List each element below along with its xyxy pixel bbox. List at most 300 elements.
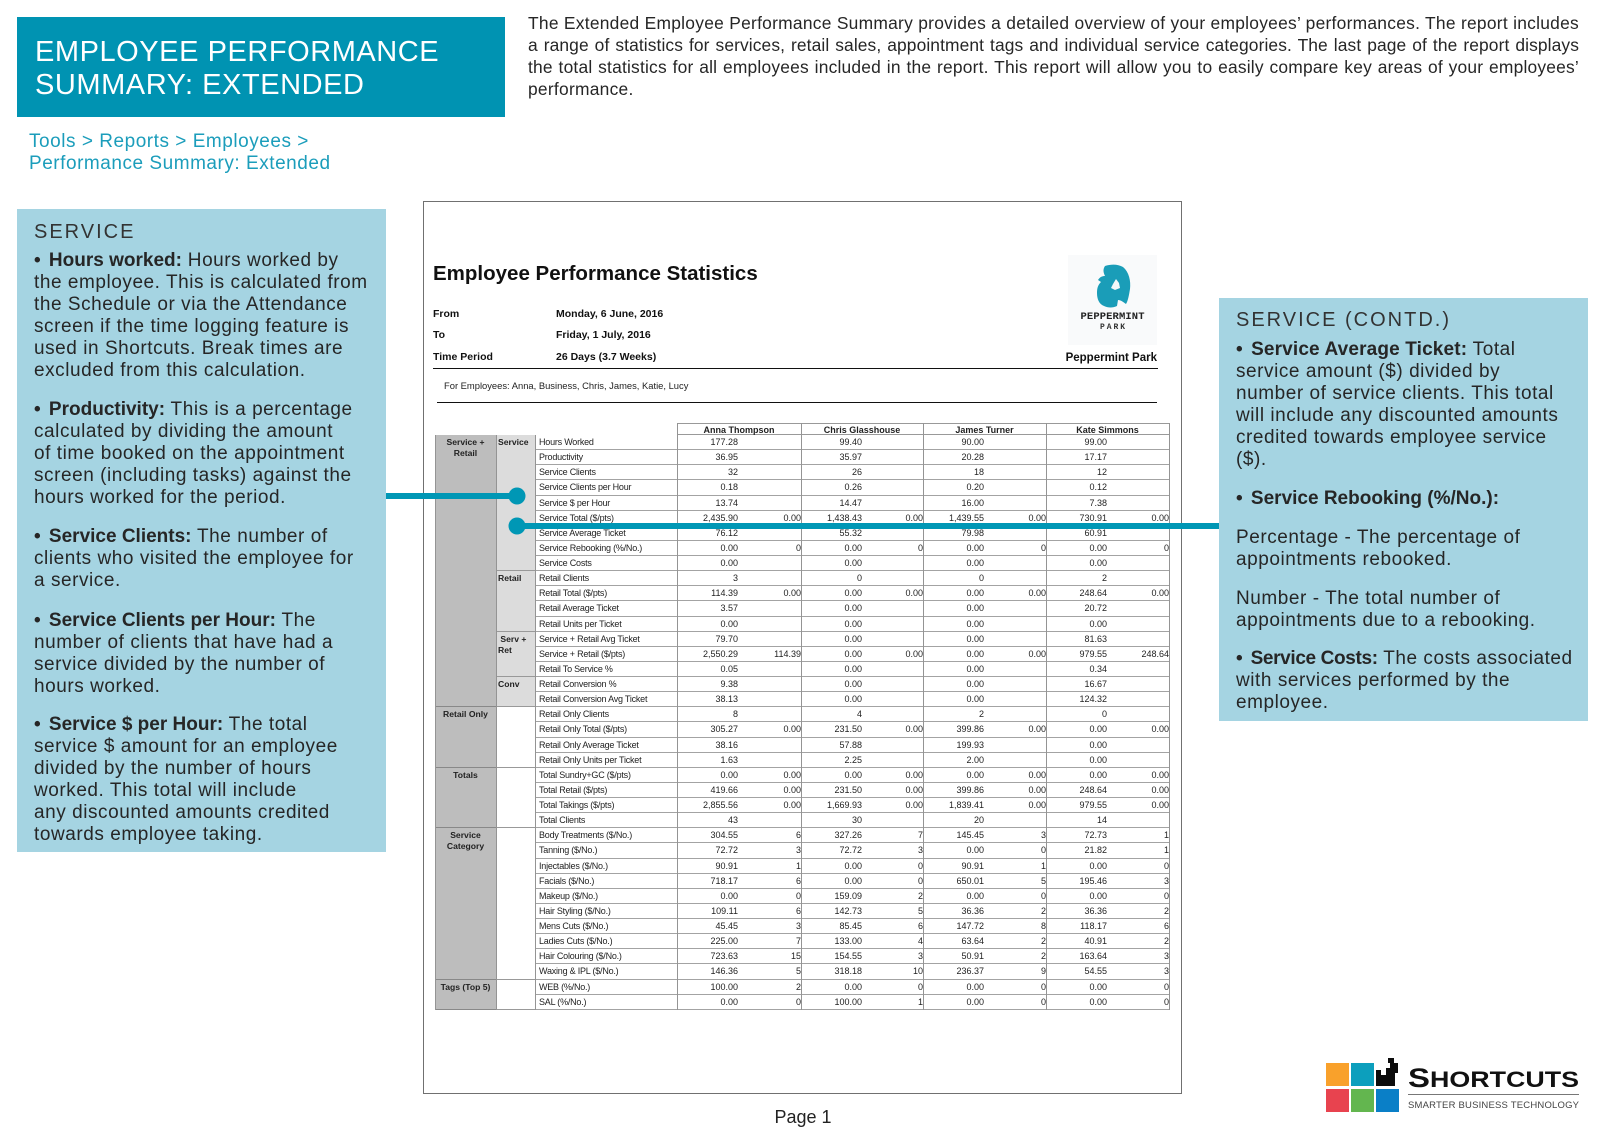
table rows: 60.91 bbox=[1084, 528, 1107, 538]
column header: Anna Thompson: Anna Thompson bbox=[704, 425, 774, 435]
table rows: 0.00 bbox=[720, 543, 738, 553]
text: service average ticket bbox=[1236, 339, 1558, 470]
table rows: 2 bbox=[1164, 906, 1169, 916]
table rows: 0.00 bbox=[1151, 800, 1169, 810]
table rows: 0.00 bbox=[1089, 558, 1107, 568]
table rows: 0 bbox=[796, 997, 801, 1007]
column header: James Turner bbox=[923, 423, 1046, 435]
title banner bbox=[17, 17, 505, 117]
table rows: 0.00 bbox=[1151, 588, 1169, 598]
table rows: 231.50 bbox=[834, 785, 862, 795]
table rows: 0.00 bbox=[1028, 785, 1046, 795]
table rows: 0.00 bbox=[1151, 770, 1169, 780]
table rows: 0.18 bbox=[720, 482, 738, 492]
table rows: 85.45 bbox=[839, 921, 862, 931]
table rows: 0.00 bbox=[1089, 891, 1107, 901]
table rows: 0.00 bbox=[966, 997, 984, 1007]
text: service average ticket: • Service Average Ticket: Total bbox=[1236, 339, 1516, 360]
table rows: Retail Conversion Avg Ticket bbox=[539, 694, 647, 704]
table rows: 3 bbox=[796, 845, 801, 855]
table rows: 20.28 bbox=[961, 452, 984, 462]
table rows: 0.00 bbox=[1089, 982, 1107, 992]
text: service clients: • Service Clients: The number of bbox=[34, 526, 328, 547]
table rows: Retail Average Ticket bbox=[539, 603, 619, 613]
table rows: Service + Retail Avg Ticket bbox=[539, 634, 640, 644]
text: productivity: hours worked for the period. bbox=[34, 487, 286, 508]
table rows: 36.95 bbox=[715, 452, 738, 462]
table rows: 0.00 bbox=[844, 860, 862, 870]
text: service clients per hour bbox=[34, 610, 333, 697]
table rows: 0 bbox=[1041, 997, 1046, 1007]
table rows: Mens Cuts ($/No.) bbox=[539, 921, 608, 931]
table rows: 3 bbox=[1164, 951, 1169, 961]
table rows: 79.98 bbox=[961, 528, 984, 538]
table rows: 0.00 bbox=[720, 770, 738, 780]
table rows: 6 bbox=[918, 921, 923, 931]
table rows: 0.00 bbox=[1089, 740, 1107, 750]
table rows: 72.73 bbox=[1084, 830, 1107, 840]
employees filter line: For Employees: Anna, Business, Chris, James, Katie, Lucy bbox=[444, 380, 688, 391]
table rows: Hair Colouring ($/No.) bbox=[539, 951, 622, 961]
table rows: 248.64 bbox=[1141, 649, 1169, 659]
table rows: 0.00 bbox=[783, 785, 801, 795]
table rows: 2 bbox=[796, 982, 801, 992]
table rows: 0.00 bbox=[720, 618, 738, 628]
table rows: 38.16 bbox=[715, 740, 738, 750]
table rows: 99.00 bbox=[1084, 437, 1107, 447]
table rows: 0.00 bbox=[1151, 785, 1169, 795]
group: service + retail: Retail bbox=[454, 448, 477, 458]
text: service dollars per hour: divided by the number of hours bbox=[34, 758, 311, 779]
text: rebooking number bbox=[1236, 588, 1536, 631]
table rows: 2 bbox=[1164, 936, 1169, 946]
table rows: 72.72 bbox=[715, 845, 738, 855]
text: service average ticket: service amount ($) divided by bbox=[1236, 361, 1500, 382]
table rows: Waxing & IPL ($/No.) bbox=[539, 966, 618, 976]
group: totals bbox=[435, 768, 496, 828]
report page frame bbox=[423, 201, 1182, 1094]
table rows: Total Sundry+GC ($/pts) bbox=[539, 770, 631, 780]
table rows: 0.00 bbox=[1028, 770, 1046, 780]
table rows: 0.00 bbox=[783, 724, 801, 734]
table rows: 0 bbox=[1164, 982, 1169, 992]
table rows: 0.00 bbox=[966, 664, 984, 674]
table rows: 6 bbox=[796, 906, 801, 916]
table rows: 3 bbox=[918, 845, 923, 855]
table rows: 0.00 bbox=[1089, 770, 1107, 780]
table rows: 730.91 bbox=[1079, 513, 1107, 523]
table rows: 2.00 bbox=[966, 755, 984, 765]
table rows: 90.91 bbox=[961, 860, 984, 870]
column header: Anna Thompson bbox=[677, 423, 801, 435]
table rows: 1 bbox=[1041, 860, 1046, 870]
table rows: 0.34 bbox=[1089, 664, 1107, 674]
table rows: 399.86 bbox=[956, 724, 984, 734]
table rows: 4 bbox=[918, 936, 923, 946]
table rows: Retail To Service % bbox=[539, 664, 613, 674]
table rows: 979.55 bbox=[1079, 649, 1107, 659]
table rows: 0.00 bbox=[966, 845, 984, 855]
heading: service contd: SERVICE (CONTD.) bbox=[1236, 309, 1451, 331]
group: service category: Category bbox=[447, 841, 484, 851]
table rows: 0.00 bbox=[966, 634, 984, 644]
text: productivity: of time booked on the appointment bbox=[34, 443, 345, 464]
group: serv + ret: Serv + bbox=[500, 634, 526, 644]
text: service clients bbox=[34, 526, 354, 591]
text: productivity bbox=[34, 399, 353, 508]
table rows: 21.82 bbox=[1084, 845, 1107, 855]
table rows: 0.00 bbox=[966, 558, 984, 568]
group: conv bbox=[496, 677, 536, 707]
table rows: 0.00 bbox=[844, 649, 862, 659]
table rows: 0.00 bbox=[1089, 618, 1107, 628]
table rows: 163.64 bbox=[1079, 951, 1107, 961]
table rows: 0 bbox=[1041, 982, 1046, 992]
icon: shortcuts logo bbox=[1326, 1058, 1580, 1112]
blank subgroup bbox=[496, 980, 536, 1010]
table rows: 146.36 bbox=[710, 966, 738, 976]
table rows: 0.00 bbox=[1028, 513, 1046, 523]
table rows: 0.00 bbox=[844, 876, 862, 886]
table rows: 0 bbox=[1164, 997, 1169, 1007]
table rows: 236.37 bbox=[956, 966, 984, 976]
text: service clients per hour: • Service Clients per Hour: The bbox=[34, 610, 316, 631]
table rows: 3 bbox=[1164, 966, 1169, 976]
table rows: 0.00 bbox=[1089, 997, 1107, 1007]
icon: peppermint park logo: PEPPERMINT bbox=[1080, 311, 1144, 323]
table rows: 0.00 bbox=[783, 770, 801, 780]
text: hours worked: excluded from this calculation. bbox=[34, 360, 306, 381]
table rows: Service Costs bbox=[539, 558, 592, 568]
text: service average ticket: ($). bbox=[1236, 449, 1267, 470]
table rows: 154.55 bbox=[834, 951, 862, 961]
table rows: Retail Only Total ($/pts) bbox=[539, 724, 627, 734]
table rows: 16.00 bbox=[961, 498, 984, 508]
table rows: 979.55 bbox=[1079, 800, 1107, 810]
table rows: Service $ per Hour bbox=[539, 498, 610, 508]
text: service dollars per hour: • Service $ per Hour: The total bbox=[34, 714, 308, 735]
table rows: 142.73 bbox=[834, 906, 862, 916]
table rows: 0 bbox=[796, 891, 801, 901]
intro paragraph: performance. bbox=[528, 79, 634, 99]
group: tags: Tags (Top 5) bbox=[441, 982, 490, 992]
table rows: 0.00 bbox=[844, 588, 862, 598]
table rows: 5 bbox=[1041, 876, 1046, 886]
table rows: 305.27 bbox=[710, 724, 738, 734]
report date details bbox=[433, 308, 663, 363]
table rows: 114.39 bbox=[711, 588, 738, 598]
table rows: 225.00 bbox=[710, 936, 738, 946]
table rows: 2,855.56 bbox=[703, 800, 738, 810]
table rows: Retail Only Clients bbox=[539, 709, 609, 719]
table rows: 2 bbox=[979, 709, 984, 719]
group: service category: Service bbox=[450, 830, 481, 840]
table rows: 0.00 bbox=[1028, 800, 1046, 810]
table rows: 0.00 bbox=[905, 724, 923, 734]
table rows: 36.36 bbox=[961, 906, 984, 916]
table rows: 38.13 bbox=[715, 694, 738, 704]
text: service average ticket: will include any discounted amounts bbox=[1236, 405, 1558, 426]
table rows: 0.00 bbox=[905, 800, 923, 810]
text: service clients per hour: number of clients that have had a bbox=[34, 632, 333, 653]
text: service costs bbox=[1236, 648, 1573, 713]
column header: Kate Simmons: Kate Simmons bbox=[1076, 425, 1139, 435]
intro paragraph: The Extended Employee Performance Summary provides a detailed overview of your employees’ performances. The report includes bbox=[528, 13, 1579, 33]
text: hours worked bbox=[34, 250, 368, 381]
table rows: 0.00 bbox=[1028, 588, 1046, 598]
table rows: 26 bbox=[852, 467, 862, 477]
breadcrumb path bbox=[29, 131, 331, 174]
text: hours worked: the employee. This is calculated from bbox=[34, 272, 368, 293]
title text bbox=[35, 36, 439, 101]
table rows: 0.00 bbox=[966, 679, 984, 689]
table rows: 2 bbox=[1041, 906, 1046, 916]
table rows: 124.32 bbox=[1079, 694, 1107, 704]
table rows: 723.63 bbox=[710, 951, 738, 961]
table rows: Service Clients bbox=[539, 467, 596, 477]
table rows: 0.00 bbox=[844, 664, 862, 674]
table rows: 1.63 bbox=[720, 755, 738, 765]
table rows: 13.74 bbox=[715, 498, 738, 508]
group: service: Service bbox=[498, 437, 529, 447]
table rows: Total Takings ($/pts) bbox=[539, 800, 614, 810]
group: service + retail: Service + bbox=[446, 437, 484, 447]
table rows: 99.40 bbox=[839, 437, 862, 447]
text: rebooking percentage: Percentage - The percentage of bbox=[1236, 527, 1520, 548]
table rows: 0 bbox=[918, 876, 923, 886]
table rows: Hours Worked bbox=[539, 437, 594, 447]
table rows: 0 bbox=[857, 573, 862, 583]
table rows: 0.00 bbox=[844, 770, 862, 780]
table rows: 57.88 bbox=[839, 740, 862, 750]
table rows: 1 bbox=[796, 860, 801, 870]
table rows: 81.63 bbox=[1084, 634, 1107, 644]
text: rebooking number: appointments due to a rebooking. bbox=[1236, 610, 1536, 631]
table rows: 0.00 bbox=[1151, 724, 1169, 734]
table rows: SAL (%/No.) bbox=[539, 997, 586, 1007]
table rows: 30 bbox=[852, 815, 862, 825]
intro paragraph: a range of statistics for services, retail sales, appointment tags and individual service categories. The last page of the report displays bbox=[528, 35, 1579, 55]
table rows: 0.00 bbox=[966, 982, 984, 992]
report date details: Time Period bbox=[433, 351, 493, 363]
report title: Employee Performance Statistics bbox=[433, 262, 758, 284]
text: service costs: • Service Costs: The costs associated bbox=[1236, 648, 1573, 669]
table rows: 0.00 bbox=[905, 513, 923, 523]
table rows: 1,839.41 bbox=[949, 800, 984, 810]
table rows: 0.00 bbox=[844, 982, 862, 992]
table rows: 5 bbox=[796, 966, 801, 976]
group: retail: Retail bbox=[498, 573, 521, 583]
breadcrumb path: Tools > Reports > Employees > bbox=[29, 131, 309, 152]
text: service clients: clients who visited the employee for bbox=[34, 548, 354, 569]
table rows: 0.00 bbox=[844, 603, 862, 613]
table rows: 90.91 bbox=[715, 860, 738, 870]
table rows: 0 bbox=[918, 543, 923, 553]
table rows: 76.12 bbox=[715, 528, 738, 538]
table rows: 6 bbox=[796, 830, 801, 840]
table rows: 0.20 bbox=[966, 482, 984, 492]
table rows: Retail Total ($/pts) bbox=[539, 588, 607, 598]
group: totals: Totals bbox=[453, 770, 478, 780]
text: service average ticket: number of service clients. This total bbox=[1236, 383, 1554, 404]
table rows: 17.17 bbox=[1084, 452, 1107, 462]
table rows: 2 bbox=[1041, 936, 1046, 946]
table rows: 2,550.29 bbox=[703, 649, 738, 659]
table rows: 15 bbox=[791, 951, 801, 961]
table rows: 6 bbox=[796, 876, 801, 886]
table rows: 9.38 bbox=[720, 679, 738, 689]
icon: peppermint park logo bbox=[1068, 255, 1157, 345]
table rows: 72.72 bbox=[839, 845, 862, 855]
table rows: 55.32 bbox=[839, 528, 862, 538]
table rows: 0.00 bbox=[1089, 755, 1107, 765]
table rows: 0.00 bbox=[966, 588, 984, 598]
group: tags bbox=[435, 980, 496, 1010]
table rows: 0 bbox=[1102, 709, 1107, 719]
table rows: 0.00 bbox=[966, 694, 984, 704]
table rows: 0.00 bbox=[844, 694, 862, 704]
table rows: 0.00 bbox=[783, 800, 801, 810]
table rows: 419.66 bbox=[710, 785, 738, 795]
table rows: 0 bbox=[1041, 845, 1046, 855]
group: serv + ret bbox=[496, 632, 536, 677]
group: service + retail bbox=[435, 435, 496, 707]
text: service dollars per hour: any discounted amounts credited bbox=[34, 802, 330, 823]
table rows: 0.00 bbox=[966, 603, 984, 613]
table rows: 195.46 bbox=[1079, 876, 1107, 886]
table rows: 20 bbox=[974, 815, 984, 825]
table rows: Total Retail ($/pts) bbox=[539, 785, 607, 795]
table rows: 8 bbox=[1041, 921, 1046, 931]
text: rebooking percentage: appointments rebooked. bbox=[1236, 549, 1452, 570]
table rows: 1,439.55 bbox=[949, 513, 984, 523]
heading: service: SERVICE bbox=[34, 221, 135, 243]
table rows: 3 bbox=[733, 573, 738, 583]
group: retail bbox=[496, 571, 536, 632]
text: service clients per hour: hours worked. bbox=[34, 676, 160, 697]
table rows: 1 bbox=[918, 997, 923, 1007]
table rows: 0.00 bbox=[966, 618, 984, 628]
table rows: 16.67 bbox=[1084, 679, 1107, 689]
table rows: 7.38 bbox=[1089, 498, 1107, 508]
statistics table bbox=[435, 423, 1170, 1010]
table rows: 32 bbox=[728, 467, 738, 477]
text: service rebooking: • Service Rebooking (%/No.): bbox=[1236, 488, 1499, 509]
table rows: Service + Retail ($/pts) bbox=[539, 649, 625, 659]
table rows: 12 bbox=[1097, 467, 1107, 477]
text: service dollars per hour: service $ amount for an employee bbox=[34, 736, 338, 757]
table rows: 199.93 bbox=[956, 740, 984, 750]
table rows: 231.50 bbox=[834, 724, 862, 734]
report date details: Monday, 6 June, 2016 bbox=[556, 308, 663, 320]
column header: James Turner: James Turner bbox=[955, 425, 1014, 435]
table rows: 0.00 bbox=[844, 558, 862, 568]
table rows: 0 bbox=[1164, 543, 1169, 553]
table rows: 63.64 bbox=[961, 936, 984, 946]
table rows: WEB (%/No.) bbox=[539, 982, 590, 992]
table rows: 100.00 bbox=[710, 982, 738, 992]
table rows: 0.00 bbox=[783, 513, 801, 523]
icon: shortcuts logo: SMARTER BUSINESS TECHNOLOGY bbox=[1408, 1100, 1580, 1111]
report date details: Friday, 1 July, 2016 bbox=[556, 329, 651, 341]
table rows: 0 bbox=[1164, 860, 1169, 870]
table rows: 718.17 bbox=[710, 876, 738, 886]
breadcrumb path: Performance Summary: Extended bbox=[29, 153, 331, 174]
text: service dollars per hour: worked. This total will include bbox=[34, 780, 297, 801]
table rows: 0.00 bbox=[720, 997, 738, 1007]
connector arrow: service panel to table bbox=[386, 488, 526, 504]
table rows: 0.00 bbox=[1028, 724, 1046, 734]
table rows: 3 bbox=[918, 951, 923, 961]
table rows: 40.91 bbox=[1084, 936, 1107, 946]
title text: EMPLOYEE PERFORMANCE bbox=[35, 36, 439, 68]
table rows: 0.00 bbox=[783, 588, 801, 598]
report date details: 26 Days (3.7 Weeks) bbox=[556, 351, 656, 363]
table rows: 3 bbox=[1164, 876, 1169, 886]
table rows: 0.00 bbox=[905, 649, 923, 659]
table rows: 45.45 bbox=[715, 921, 738, 931]
group: serv + ret: Ret bbox=[498, 645, 512, 655]
table rows: Total Clients bbox=[539, 815, 585, 825]
table rows: 18 bbox=[974, 467, 984, 477]
text: rebooking percentage bbox=[1236, 527, 1520, 570]
table rows: 0.00 bbox=[844, 679, 862, 689]
table rows: 2,435.90 bbox=[703, 513, 738, 523]
table rows: 248.64 bbox=[1079, 588, 1107, 598]
text: service costs: with services performed by the bbox=[1236, 670, 1510, 691]
group: service bbox=[496, 435, 536, 571]
text: rebooking number: Number - The total number of bbox=[1236, 588, 1500, 609]
table rows: 1 bbox=[1164, 830, 1169, 840]
table rows: 0.00 bbox=[720, 891, 738, 901]
table rows: 54.55 bbox=[1084, 966, 1107, 976]
icon: shortcuts logo: SHORTCUTS bbox=[1408, 1063, 1579, 1093]
table rows: 0.00 bbox=[1089, 860, 1107, 870]
table rows: 79.70 bbox=[715, 634, 738, 644]
text: hours worked: screen if the time logging feature is bbox=[34, 316, 349, 337]
table rows: 20.72 bbox=[1084, 603, 1107, 613]
table rows: 3 bbox=[796, 921, 801, 931]
table rows: 2 bbox=[1102, 573, 1107, 583]
report date details: From bbox=[433, 308, 459, 320]
table rows: 3.57 bbox=[720, 603, 738, 613]
connector arrow: table to service contd panel bbox=[508, 518, 1219, 534]
table rows: 4 bbox=[857, 709, 862, 719]
intro paragraph: the total statistics for all employees included in the report. This report will allow you to easily compare key areas of your employees’ bbox=[528, 57, 1579, 77]
text: hours worked: used in Shortcuts. Break times are bbox=[34, 338, 343, 359]
table rows: 7 bbox=[796, 936, 801, 946]
table rows: Ladies Cuts ($/No.) bbox=[539, 936, 612, 946]
panel: service bbox=[17, 209, 386, 852]
table rows: Retail Units per Ticket bbox=[539, 618, 621, 628]
table rows: 133.00 bbox=[834, 936, 862, 946]
table rows: Service Total ($/pts) bbox=[539, 513, 614, 523]
table rows bbox=[536, 437, 1169, 1010]
text: service costs: employee. bbox=[1236, 692, 1329, 713]
table rows: 248.64 bbox=[1079, 785, 1107, 795]
group: retail only: Retail Only bbox=[443, 709, 488, 719]
text: service clients per hour: service divided by the number of bbox=[34, 654, 325, 675]
table rows: 304.55 bbox=[710, 830, 738, 840]
table rows: 90.00 bbox=[961, 437, 984, 447]
table rows: 0 bbox=[979, 573, 984, 583]
table rows: 3 bbox=[1041, 830, 1046, 840]
group: service category bbox=[435, 828, 496, 980]
icon: peppermint park logo: PARK bbox=[1100, 323, 1125, 332]
table rows: 100.00 bbox=[834, 997, 862, 1007]
table rows: 8 bbox=[733, 709, 738, 719]
table rows: Productivity bbox=[539, 452, 583, 462]
